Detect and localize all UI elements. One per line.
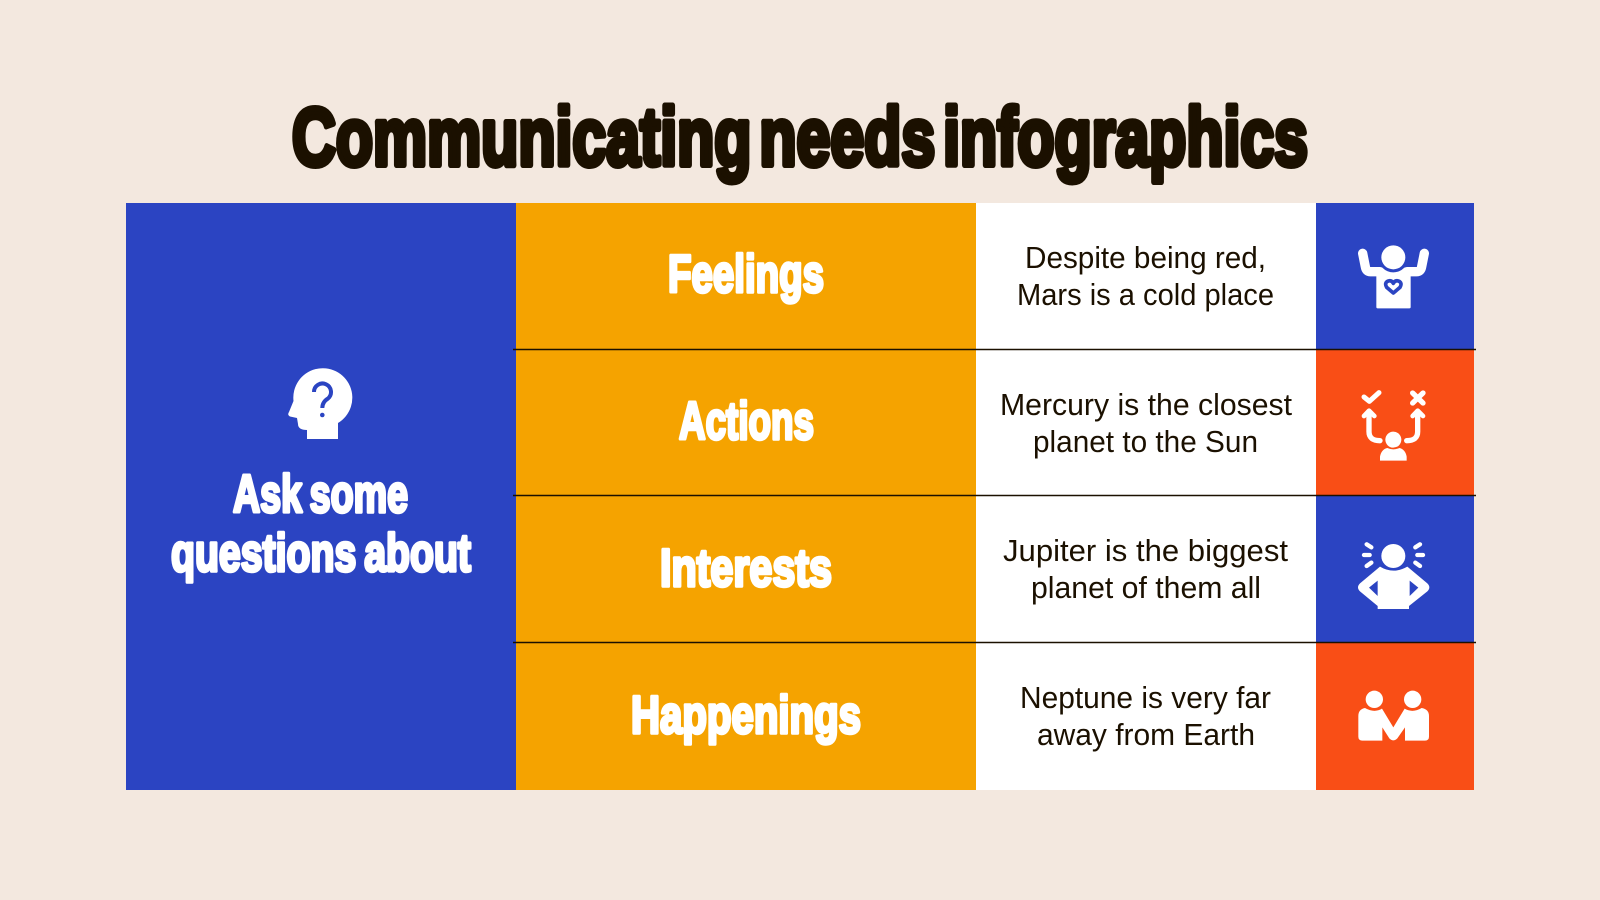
- label: Actions: Actions: [679, 392, 814, 451]
- description: Jupiter: [1003, 534, 1289, 605]
- icon: person with hands on hips: [1358, 544, 1429, 609]
- panel heading: Ask some: [233, 465, 408, 524]
- description: Mars: Mars is a cold place: [1017, 278, 1274, 312]
- panel: ask some questions: [126, 203, 516, 790]
- label: Feelings: Feelings: [668, 245, 824, 304]
- label: Happenings: Happenings: [631, 686, 861, 745]
- description: Neptune: Neptune is very far: [1020, 681, 1271, 715]
- icon: head with question mark: [288, 368, 352, 439]
- icon: two people together: [1358, 691, 1429, 741]
- column: icon cells: [1316, 203, 1474, 790]
- description: Mercury: planet to the Sun: [1033, 425, 1258, 459]
- column: topic labels: [516, 203, 976, 790]
- icon: person with heart: [1363, 242, 1424, 308]
- panel heading: questions about: [171, 524, 471, 583]
- column: descriptions: [976, 203, 1316, 790]
- label: Interests: Interests: [660, 539, 832, 598]
- icon: person choosing between check and cross: [1364, 393, 1423, 461]
- description: Neptune: [1020, 681, 1271, 752]
- description: Mars: Despite being red,: [1025, 241, 1266, 275]
- panel heading: [171, 465, 471, 583]
- description: Mercury: Mercury is the closest: [1000, 388, 1293, 422]
- description: Neptune: away from Earth: [1037, 718, 1255, 752]
- description: Jupiter: Jupiter is the biggest: [1003, 534, 1289, 568]
- description: Mars: [1017, 241, 1274, 312]
- description: Jupiter: planet of them all: [1031, 571, 1261, 605]
- description: Mercury: [1000, 388, 1293, 459]
